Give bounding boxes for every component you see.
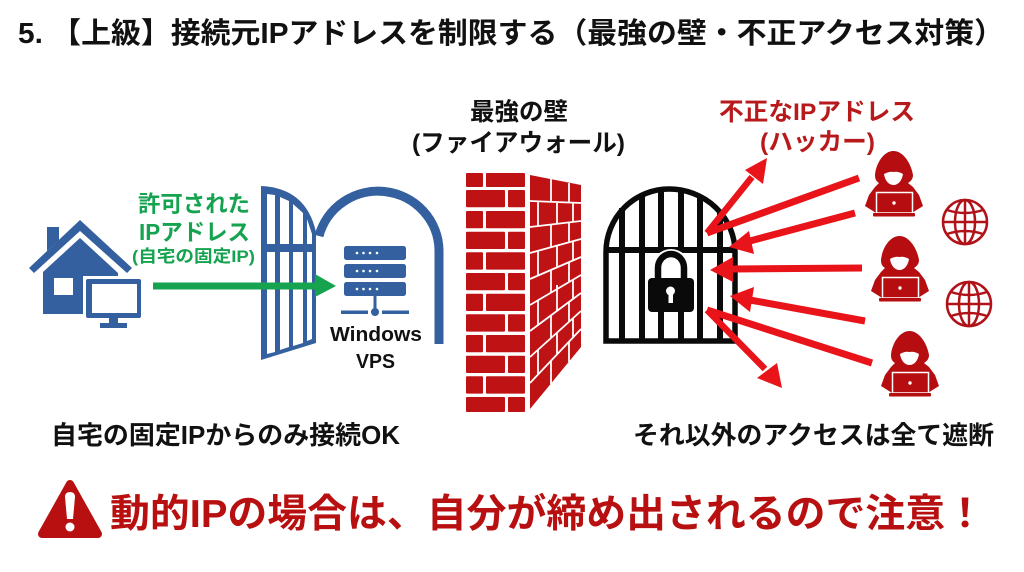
icon: hacker 2 — [871, 236, 929, 302]
icon: globe 2 — [947, 282, 991, 326]
icon: warning triangle — [42, 484, 98, 534]
heading: unauthorized IP: (ハッカー) — [760, 129, 875, 156]
wall side face — [530, 175, 581, 409]
arrow: second attack — [729, 213, 855, 254]
icon: server — [341, 246, 409, 316]
arrow: deflected up — [707, 158, 767, 233]
label: Windows VPS — [330, 324, 422, 373]
line: rebound from top — [707, 178, 859, 233]
arrow: third attack — [710, 257, 862, 282]
icon: globe 1 — [943, 200, 987, 244]
heading: unauthorized IP: 不正なIPアドレス — [719, 99, 915, 126]
heading: strongest wall: 最強の壁 — [470, 98, 568, 126]
heading: unauthorized IP — [719, 99, 915, 156]
label: Windows VPS: VPS — [356, 351, 395, 373]
label: Windows VPS: Windows — [330, 324, 422, 346]
caption: right: それ以外のアクセスは全て遮断 — [633, 422, 994, 450]
arrow: deflected down — [707, 310, 782, 388]
heading: strongest wall — [412, 98, 625, 157]
arrow: fourth attack — [730, 287, 865, 321]
title: 5. 【上級】接続元IPアドレスを制限する（最強の壁・不正アクセス対策） — [18, 17, 1004, 50]
icon: house with computer — [29, 220, 144, 328]
icon: hacker 3 — [881, 331, 939, 396]
red attack arrows — [707, 158, 872, 388]
label: allowed IP address: 許可された — [138, 192, 250, 217]
line: rebound from bottom — [707, 310, 872, 363]
icon: hacker 1 — [865, 151, 923, 216]
label: allowed IP address: (自宅の固定IP) — [132, 246, 255, 266]
gate arch — [319, 191, 439, 344]
caption: left: 自宅の固定IPからのみ接続OK — [51, 422, 401, 450]
green arrow: allowed access — [153, 274, 336, 297]
label: allowed IP address — [132, 192, 255, 266]
open gate door — [261, 186, 316, 360]
icon: locked cage gate — [606, 189, 735, 342]
warning message: 動的IPの場合は、自分が締め出されるので注意！ — [110, 493, 985, 536]
label: allowed IP address: IPアドレス — [139, 219, 250, 245]
icon: padlock — [648, 249, 694, 312]
wall front face — [466, 173, 525, 412]
icon: brick wall — [466, 173, 581, 412]
heading: strongest wall: (ファイアウォール) — [412, 130, 625, 157]
